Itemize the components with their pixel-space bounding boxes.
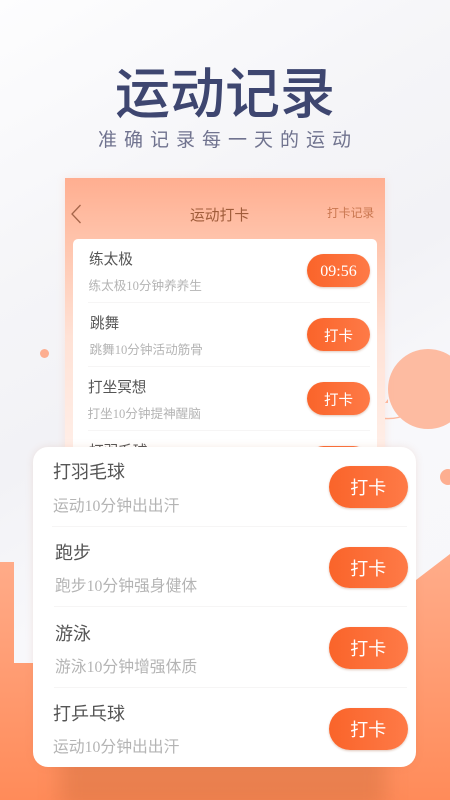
item: meditation: 打卡: [324, 393, 353, 409]
item: dance: [90, 315, 371, 357]
list card: [73, 239, 377, 468]
icon: back arrow: [71, 204, 81, 224]
header link: records: 打卡记录: [327, 206, 374, 220]
item: running: 打卡: [350, 558, 386, 578]
item: badminton peek: 打羽毛球: [89, 444, 147, 460]
panel: floating card: [33, 447, 416, 767]
item: badminton: 运动10分钟出出汗: [53, 498, 179, 515]
item: badminton: [53, 462, 409, 515]
item: swimming: 游泳10分钟增强体质: [55, 659, 197, 676]
item: swimming: 游泳: [55, 624, 91, 644]
decorative dot: left: [40, 349, 49, 358]
item: dance: 跳舞10分钟活动筋骨: [90, 343, 203, 357]
item: meditation: 打坐10分钟提神醒脑: [88, 407, 201, 421]
item: swimming: 打卡: [350, 639, 386, 659]
panel: phone screen: [65, 178, 385, 468]
header title: 运动打卡: [190, 208, 249, 224]
item: badminton: 打卡: [350, 478, 386, 498]
item: badminton: 打羽毛球: [53, 462, 125, 482]
item: badminton peek: [89, 443, 359, 460]
item: table tennis: 打卡: [350, 720, 386, 740]
decorative circle: large right: [388, 349, 450, 429]
item: tai chi: 09:56: [320, 263, 357, 280]
item: running: [55, 543, 409, 595]
item: running: 跑步: [55, 543, 91, 563]
item: meditation: 打坐冥想: [88, 380, 146, 396]
item: table tennis: 运动10分钟出出汗: [53, 739, 179, 756]
decorative dot: right: [440, 469, 450, 485]
item: running: 跑步10分钟强身健体: [55, 578, 197, 595]
item: table tennis: 打乒乓球: [53, 704, 125, 724]
subtitle: 准确记录每一天的运动: [98, 125, 358, 152]
item: meditation: [88, 379, 371, 421]
decorative curve behind circle: [385, 399, 400, 420]
item: table tennis: [53, 704, 409, 756]
card drop shadow: [60, 720, 386, 800]
item: tai chi: [88, 251, 371, 293]
title: 运动记录: [115, 49, 335, 129]
item: dance: 打卡: [324, 329, 353, 345]
item: swimming: [55, 624, 409, 676]
item: tai chi: 练太极: [89, 252, 133, 268]
item: tai chi: 练太极10分钟养养生: [88, 279, 202, 293]
item: dance: 跳舞: [90, 316, 119, 332]
